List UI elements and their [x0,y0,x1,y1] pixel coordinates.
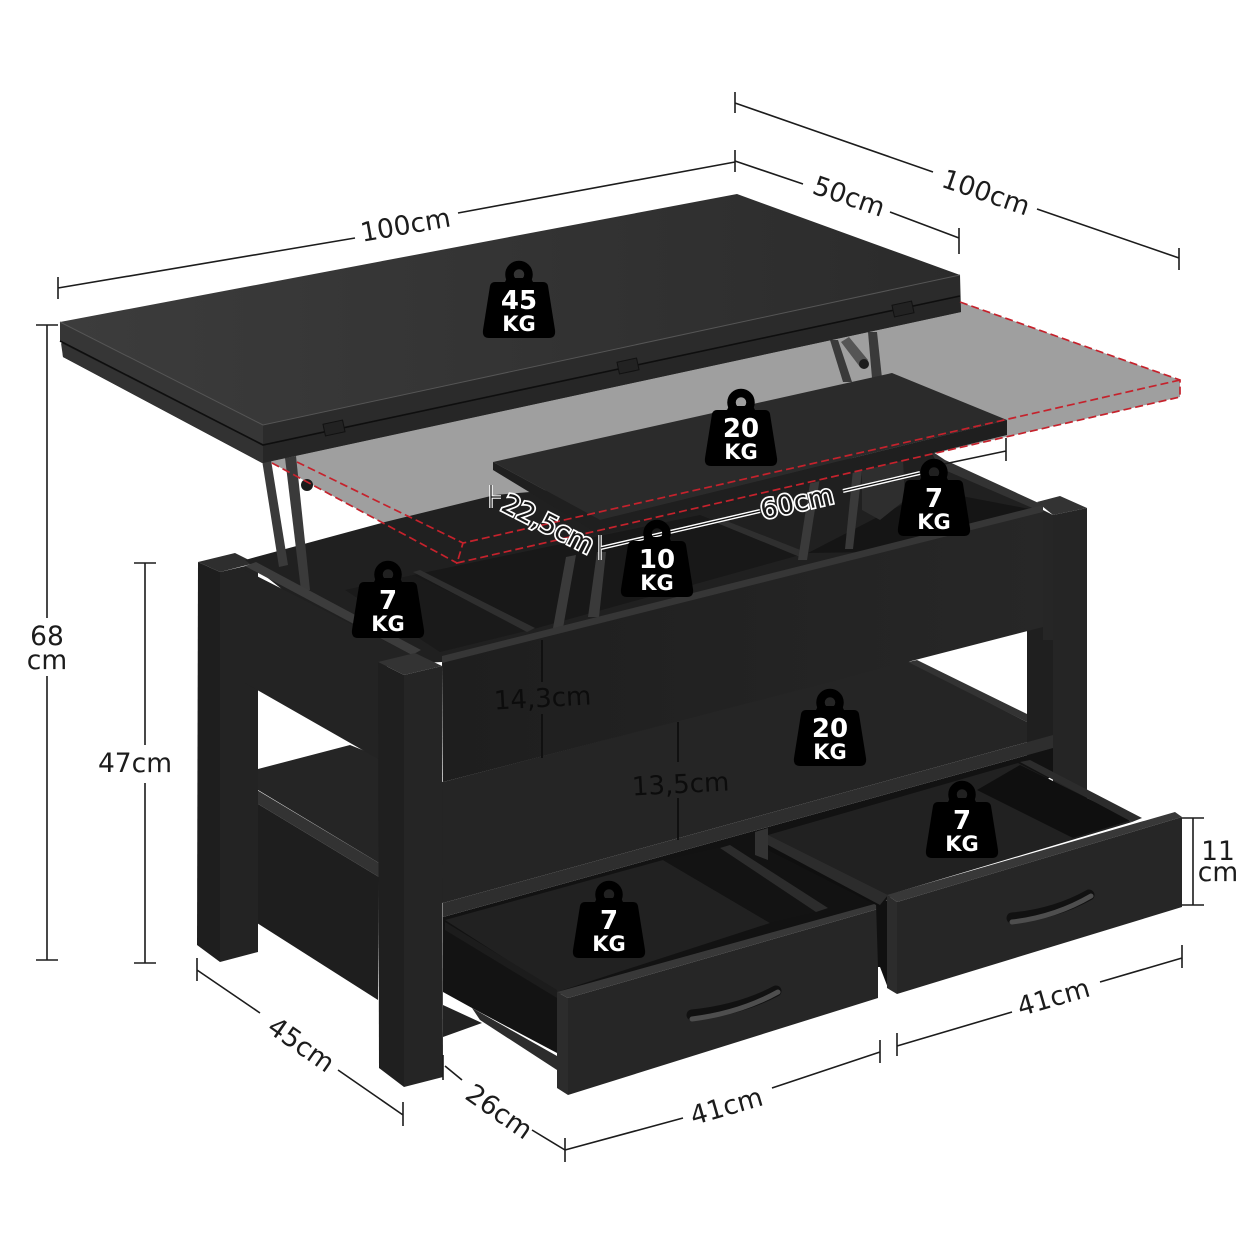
dimension: 60cm: 60cm [757,479,837,526]
shelf front lip and drawer cavity [443,735,1053,995]
weight: 10 KG centre compartment: KG [640,571,674,595]
weight: 7 KG right compartment: KG [917,510,951,534]
weight: 7 KG right drawer: 7 [953,806,971,836]
lower left side panel [245,796,379,1000]
dimension: 50cm [735,161,959,254]
weight: 20 KG lower shelf: 20 [812,714,848,744]
dimension: left drawer 41cm [565,1040,880,1162]
dimension: drawer depth 26cm: 26cm [460,1078,538,1146]
divider left [413,570,535,632]
shelf surface [258,661,1053,903]
right drawer [768,760,1182,994]
dimension: right 100cm: 100cm [938,163,1034,222]
dimension: right 100cm [735,92,1179,270]
drawer rail [472,1008,557,1070]
weight: 45 KG top [483,265,555,338]
weight: 7 KG right drawer [926,785,998,858]
dimension: 14,3cm [493,640,592,758]
dimension: height 47cm: 47cm [98,748,172,779]
lift arms [262,332,882,628]
weight: 7 KG left drawer [573,885,645,958]
back-left leg [198,553,255,572]
box left side panel [245,570,410,760]
drawer front [557,903,878,998]
right rim [930,450,1043,510]
weight: 20 KG lower shelf [794,693,866,766]
weight: 7 KG left drawer: KG [592,932,626,956]
weight: 10 KG centre compartment: 10 [639,545,675,575]
dimension: left drawer 41cm: 41cm [687,1082,767,1132]
table: lower shelf and back-left leg [197,553,1053,1000]
shelf left lip [245,790,379,877]
dimension: 14,3cm: 14,3cm [493,681,592,717]
weight: 20 KG middle shelf: 20 [723,414,759,444]
table: box panels and front-left leg [245,505,1043,1087]
lift top panel [60,194,961,463]
red dashed outline of extended top [272,302,1180,563]
divider right [717,520,808,557]
lift mechanism plate [862,460,905,520]
dimension: height 68cm: cm [27,645,67,676]
weight: 7 KG right drawer: KG [945,832,979,856]
weight: 45 KG top: KG [502,312,536,336]
dimension: 60cm [601,438,1006,548]
table: interior of lift compartment [245,450,1043,665]
dimension: 22,5cm: 22,5cm [497,488,599,561]
drawer floor [768,763,1132,895]
weight: 7 KG left compartment [352,565,424,638]
dimension: overall width 100cm: 100cm [358,202,453,249]
weight: 20 KG lower shelf: KG [813,740,847,764]
left drawer [443,845,878,1095]
dimension: 11cm [1182,818,1238,905]
weight: 7 KG left compartment: KG [371,612,405,636]
dimension: 50cm: 50cm [809,170,889,224]
dimension: height 68cm: 68 [30,621,64,652]
handle [1012,895,1089,918]
table: back-right leg [1027,496,1087,800]
box front panel [442,510,1043,782]
weight: 7 KG right compartment [898,463,970,536]
middle lift shelf [493,373,1007,535]
dimension: 13,5cm [631,722,730,840]
dimension: 11cm: 11 [1201,836,1235,867]
weight: 10 KG centre compartment [621,524,693,597]
dimension: drawer depth 26cm [443,1055,565,1150]
weight: 20 KG middle shelf: KG [724,440,758,464]
dimension: right drawer 41cm: 41cm [1014,973,1094,1023]
dimension: height 47cm [98,563,172,963]
handle [692,991,776,1015]
dimension: right drawer 41cm [897,945,1182,1056]
weight: 45 KG top: 45 [501,286,537,316]
dimension: 11cm: cm [1198,857,1238,888]
dimension: height 68cm [27,325,67,960]
weight: 7 KG left drawer: 7 [600,906,618,936]
front-left leg [378,653,442,675]
weight: 7 KG right compartment: 7 [925,484,943,514]
drawer front [887,812,1182,902]
dimension: 13,5cm: 13,5cm [631,767,730,803]
extension panel: translucent extended top [262,302,1180,563]
dimension: overall width 100cm [58,150,735,299]
weight: 7 KG left compartment: 7 [379,586,397,616]
dimension: depth 45cm [197,958,403,1126]
hinges [323,420,345,436]
dimension: depth 45cm: 45cm [262,1011,340,1079]
weight: 20 KG middle shelf [705,393,777,466]
drawer floor [445,860,770,992]
